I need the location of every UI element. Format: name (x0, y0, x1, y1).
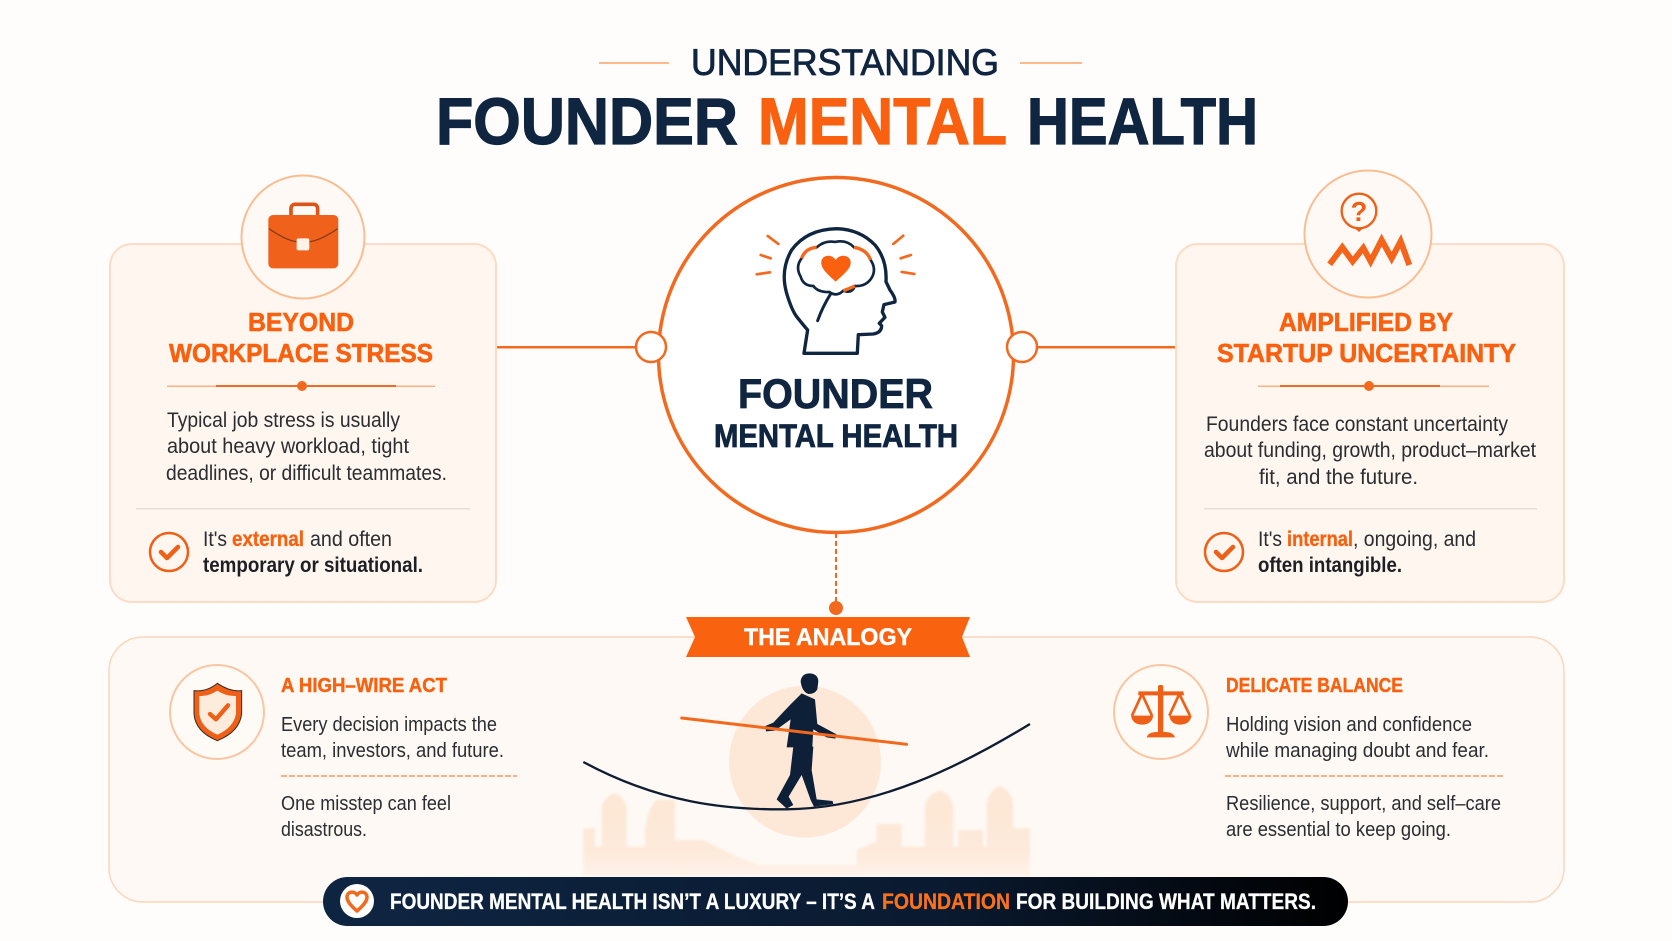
figure (765, 673, 837, 809)
text: internal callout: It's (1258, 528, 1282, 551)
text: internal callout (1258, 528, 1476, 577)
connector lines (496, 346, 1176, 602)
text: delicate balance: are essential to keep going. (1226, 819, 1451, 841)
heading: beyond workplace stress: WORKPLACE STRESS (169, 338, 433, 368)
text: closing statement (390, 889, 1316, 914)
heading: beyond workplace stress (169, 307, 433, 368)
title: FOUNDER (436, 84, 738, 158)
text: external callout: It's (203, 528, 227, 551)
text: job stress description: Typical job stress is usually (167, 409, 400, 432)
text: a high-wire act: One misstep can feel (281, 793, 451, 815)
text: delicate balance: Resilience, support, and self–care (1226, 793, 1501, 815)
heading: beyond workplace stress: BEYOND (248, 307, 354, 337)
skyline (583, 786, 1030, 875)
icon: check (1205, 533, 1243, 571)
text: a high-wire act (281, 675, 517, 841)
text: closing statement: FOR BUILDING WHAT MATTERS. (1016, 889, 1316, 914)
panel: amplified by startup uncertainty (1176, 170, 1564, 602)
text: uncertainty description: fit, and the future. (1259, 466, 1418, 489)
icon: question and zigzag: ? (1351, 196, 1367, 227)
text: a high-wire act: A HIGH–WIRE ACT (281, 675, 447, 697)
text: internal callout: often intangible. (1258, 554, 1402, 577)
banner: the analogy (686, 601, 970, 657)
text: job stress description: about heavy workload, tight (167, 435, 409, 458)
text: uncertainty description: Founders face constant uncertainty (1206, 413, 1508, 436)
text: a high-wire act: team, investors, and future. (281, 740, 504, 762)
heading: founder mental health: MENTAL HEALTH (714, 418, 958, 454)
heading: amplified by startup uncertainty: STARTUP UNCERTAINTY (1217, 338, 1516, 368)
title: MENTAL (758, 84, 1007, 158)
text: external callout: external (232, 528, 304, 551)
text: a high-wire act: Every decision impacts the (281, 714, 497, 736)
icon: question and zigzag (1304, 170, 1432, 298)
title: HEALTH (1027, 84, 1258, 158)
text: job stress description: deadlines, or difficult teammates. (166, 462, 447, 485)
text: closing statement: FOUNDER MENTAL HEALTH ISN’T A LUXURY – IT’S A (390, 889, 875, 914)
banner: the analogy: THE ANALOGY (744, 624, 912, 651)
icon: heart (340, 884, 374, 918)
heading: amplified by startup uncertainty: AMPLIFIED BY (1279, 307, 1453, 337)
text: job stress description (166, 409, 447, 485)
title: UNDERSTANDING (691, 42, 999, 83)
icon: scales (1114, 665, 1208, 759)
text: delicate balance: Holding vision and confidence (1226, 714, 1472, 736)
text: a high-wire act: disastrous. (281, 819, 367, 841)
title (436, 42, 1258, 158)
footer banner (323, 877, 1348, 926)
heading: founder mental health: FOUNDER (738, 370, 933, 417)
text: external callout (203, 528, 423, 577)
text: uncertainty description (1204, 413, 1536, 489)
icon: briefcase (242, 176, 364, 298)
text: delicate balance (1225, 675, 1503, 841)
text: internal callout: internal (1287, 528, 1353, 551)
text: delicate balance: DELICATE BALANCE (1226, 675, 1403, 697)
heading: amplified by startup uncertainty (1217, 307, 1516, 368)
divider with dot (1258, 381, 1489, 391)
text: external callout: temporary or situational. (203, 554, 423, 577)
illustration: tightrope walker (583, 673, 1030, 875)
icon: check (150, 533, 188, 571)
heading: founder mental health (714, 370, 958, 454)
icon: head with brain and heart (757, 229, 914, 353)
text: closing statement: FOUNDATION (882, 889, 1010, 914)
panel: beyond workplace stress (110, 176, 496, 602)
panel: central circle (636, 178, 1037, 532)
panel: the analogy (109, 637, 1564, 902)
text: delicate balance: while managing doubt and fear. (1225, 740, 1489, 762)
text: external callout: and often (310, 528, 392, 551)
icon: shield (170, 665, 264, 759)
text: internal callout: , ongoing, and (1353, 528, 1476, 551)
divider with dot (167, 381, 435, 391)
connector node left (636, 332, 666, 362)
text: uncertainty description: about funding, growth, product–market (1204, 439, 1536, 462)
connector node right (1007, 332, 1037, 362)
